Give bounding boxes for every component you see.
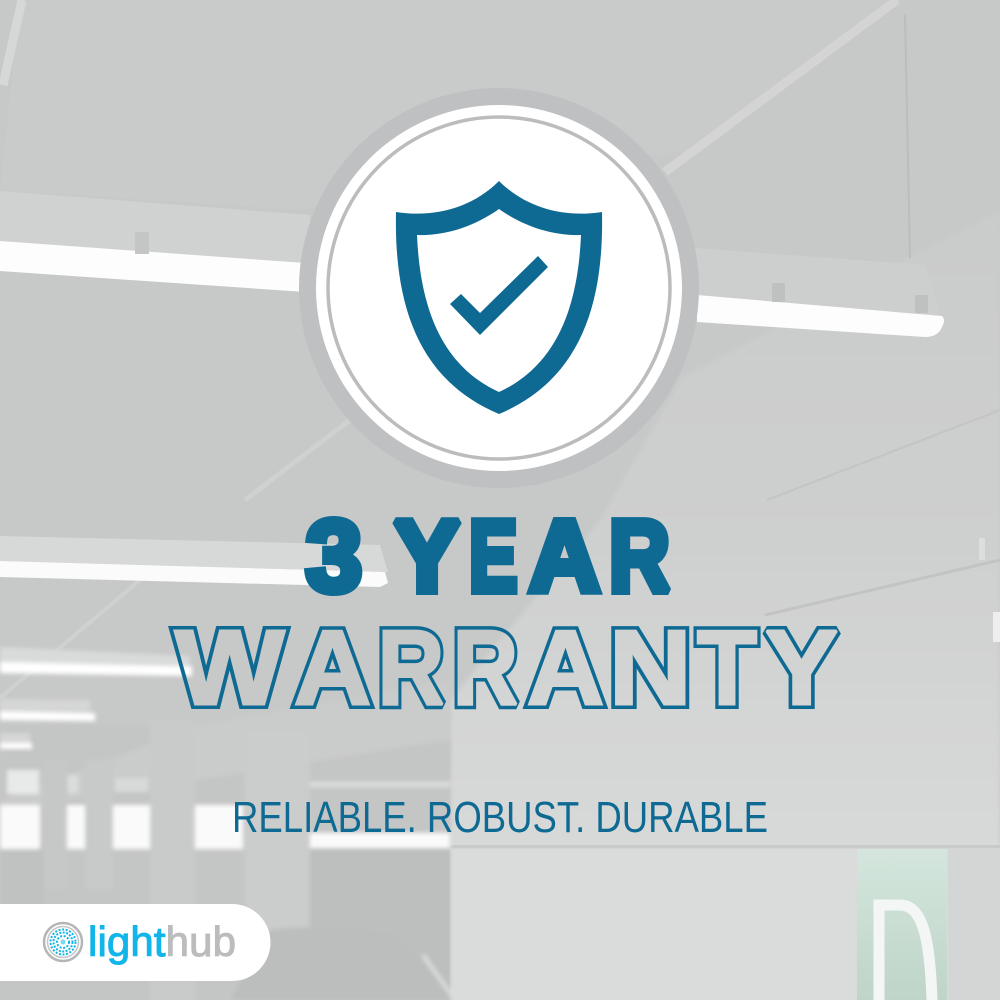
heading: WARRANTY outlined <box>168 626 841 710</box>
icon: shield with check mark <box>396 181 602 414</box>
light fixture: mid left <box>0 536 388 587</box>
heading: WARRANTY outlined: R <box>453 609 518 727</box>
heading: WARRANTY outlined: T <box>697 609 757 727</box>
light fixtures: distant left <box>0 647 192 749</box>
logo pill <box>0 904 270 981</box>
light fixture: top left <box>0 191 310 292</box>
heading: 3 YEAR: 3 <box>306 501 362 613</box>
heading: 3 YEAR: Y <box>394 501 460 613</box>
ceiling slab <box>0 0 900 210</box>
heading: WARRANTY outlined: N <box>609 609 692 727</box>
icon: lighthub logo mark <box>44 923 82 961</box>
heading: WARRANTY outlined: Y <box>765 609 838 727</box>
right wall <box>450 210 1000 850</box>
warranty badge <box>299 88 699 488</box>
heading: WARRANTY outlined: A <box>294 609 371 727</box>
wall fixtures right <box>993 612 1000 642</box>
lower left garage <box>0 680 455 1000</box>
heading: 3 YEAR: E <box>469 501 518 613</box>
heading: WARRANTY outlined: R <box>378 609 444 727</box>
badge inner ring <box>328 117 670 459</box>
badge outer ring <box>299 88 699 488</box>
light fixture: top right <box>695 248 944 337</box>
heading: 3 YEAR: A <box>529 501 600 613</box>
heading: WARRANTY outlined: W <box>175 609 284 727</box>
logo wordmark: lighthub <box>88 918 236 965</box>
tagline: RELIABLE. ROBUST. DURABLE <box>232 794 768 842</box>
heading: WARRANTY outlined: A <box>527 609 604 727</box>
badge white disc <box>316 105 682 471</box>
pipes <box>0 0 1000 698</box>
heading: 3 YEAR: R <box>609 501 670 613</box>
green parking sign <box>857 849 947 1000</box>
lower right wall <box>450 849 1000 1000</box>
